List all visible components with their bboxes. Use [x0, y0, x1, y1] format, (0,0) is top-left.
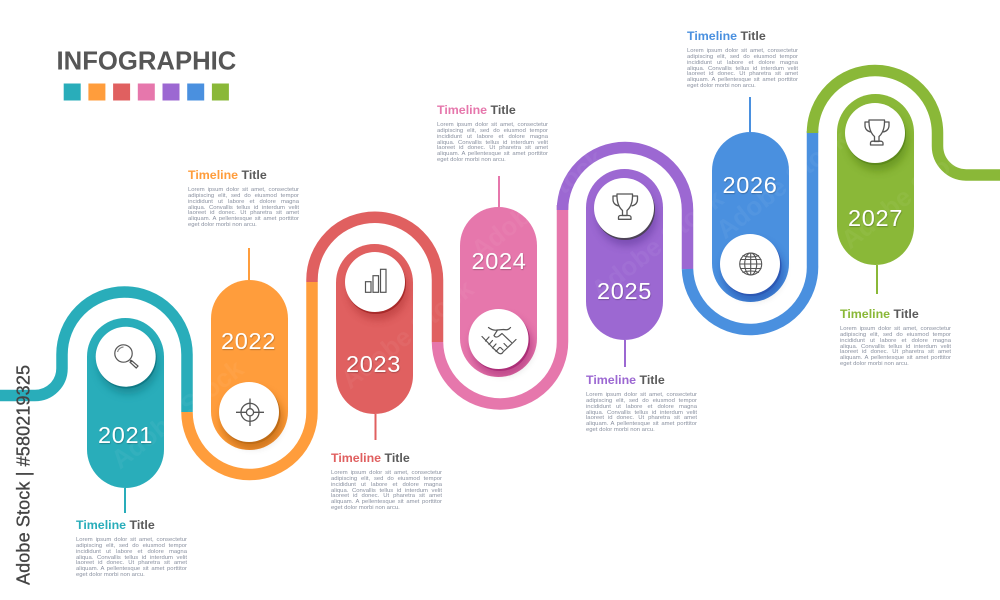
text block 2025: Lorem ipsum dolor sit amet, consectetur [586, 392, 697, 398]
icon: globe [740, 253, 762, 275]
text block 2021: eget dolor morbi non arcu. [76, 572, 145, 578]
text block 2024: Timeline Title [437, 103, 516, 117]
text block 2021: laoreet id donec. Ut pharetra sit amet [76, 560, 187, 566]
text block 2026: aliqua. Convallis tellus id interdum velit [687, 66, 798, 72]
year 2025: 2025 [597, 278, 652, 304]
text block 2024: aliqua. Convallis tellus id interdum velit [437, 140, 548, 146]
vertical stock id: Adobe Stock | #580219325 [14, 365, 34, 585]
text block 2027: Timeline Title [840, 307, 919, 321]
text block 2022: aliqua. Convallis tellus id interdum velit [188, 205, 299, 211]
text block 2027: eget dolor morbi non arcu. [840, 361, 909, 367]
text block 2023: incididunt ut labore et dolore magna [331, 482, 442, 488]
text block 2027 [840, 307, 951, 367]
legend squares [64, 84, 229, 100]
stock watermarks: Adobe Stock [710, 123, 854, 245]
text block 2027: adipiscing elit, sed do eiusmod tempor [840, 332, 951, 338]
text block 2024: incididunt ut labore et dolore magna [437, 134, 548, 140]
stock watermarks: Adobe Stock [835, 133, 979, 255]
text block 2024: aliquam. A pellentesque sit amet porttitor [437, 151, 548, 157]
text block 2026 [687, 29, 798, 89]
text block 2026: Lorem ipsum dolor sit amet, consectetur [687, 48, 798, 54]
year 2027: 2027 [848, 205, 903, 231]
text block 2021: adipiscing elit, sed do eiusmod tempor [76, 543, 187, 549]
text block 2023: adipiscing elit, sed do eiusmod tempor [331, 476, 442, 482]
stock watermarks [105, 123, 979, 475]
text block 2023: laoreet id donec. Ut pharetra sit amet [331, 493, 442, 499]
icon: handshake [482, 328, 516, 354]
text block 2021: Timeline Title [76, 518, 155, 532]
text block 2026: Timeline Title [687, 29, 766, 43]
text block 2023: eget dolor morbi non arcu. [331, 505, 400, 511]
text block 2023: aliqua. Convallis tellus id interdum velit [331, 488, 442, 494]
text block 2022: Lorem ipsum dolor sit amet, consectetur [188, 187, 299, 193]
milestone 2022 [211, 248, 288, 451]
text block 2025: eget dolor morbi non arcu. [586, 427, 655, 433]
text block 2025: Timeline Title [586, 373, 665, 387]
text block 2024 [437, 103, 548, 163]
text block 2024: Lorem ipsum dolor sit amet, consectetur [437, 122, 548, 128]
text block 2027: aliquam. A pellentesque sit amet porttitor [840, 355, 951, 361]
text block 2022: Timeline Title [188, 168, 267, 182]
text block 2027: Lorem ipsum dolor sit amet, consectetur [840, 326, 951, 332]
text block 2027: aliqua. Convallis tellus id interdum velit [840, 344, 951, 350]
text block 2024: eget dolor morbi non arcu. [437, 157, 506, 163]
text block 2027: incididunt ut labore et dolore magna [840, 338, 951, 344]
text block 2021: aliquam. A pellentesque sit amet porttitor [76, 566, 187, 572]
icon: trophy [613, 194, 638, 219]
text block 2021: Lorem ipsum dolor sit amet, consectetur [76, 537, 187, 543]
text block 2024: laoreet id donec. Ut pharetra sit amet [437, 145, 548, 151]
year 2026: 2026 [722, 172, 778, 198]
text block 2022: incididunt ut labore et dolore magna [188, 199, 299, 205]
text block 2025: aliqua. Convallis tellus id interdum velit [586, 410, 697, 416]
year 2022: 2022 [221, 328, 276, 354]
milestone 2024 [460, 176, 537, 378]
year 2024: 2024 [471, 248, 527, 274]
icon: target [236, 398, 264, 426]
text block 2023: aliquam. A pellentesque sit amet porttitor [331, 499, 442, 505]
winding timeline road [0, 70, 1000, 475]
text block 2025: adipiscing elit, sed do eiusmod tempor [586, 398, 697, 404]
icon: magnifier [115, 345, 138, 368]
stock watermarks: Adobe Stock [335, 273, 479, 395]
text block 2026: incididunt ut labore et dolore magna [687, 60, 798, 66]
text block 2027: laoreet id donec. Ut pharetra sit amet [840, 349, 951, 355]
title: INFOGRAPHIC [56, 48, 236, 76]
text block 2024: adipiscing elit, sed do eiusmod tempor [437, 128, 548, 134]
text block 2023: Lorem ipsum dolor sit amet, consectetur [331, 470, 442, 476]
text block 2025 [586, 373, 697, 433]
text block 2021 [76, 518, 187, 578]
icon: trophy [865, 120, 889, 145]
milestone 2026 [712, 97, 789, 303]
icon: bar chart [366, 269, 386, 292]
text block 2022: laoreet id donec. Ut pharetra sit amet [188, 210, 299, 216]
text block 2021: aliqua. Convallis tellus id interdum velit [76, 555, 187, 561]
year 2021: 2021 [98, 422, 153, 448]
text block 2022: adipiscing elit, sed do eiusmod tempor [188, 193, 299, 199]
milestone 2025 [586, 169, 663, 367]
text block 2026: laoreet id donec. Ut pharetra sit amet [687, 71, 798, 77]
milestone 2021 [87, 318, 164, 513]
text block 2026: adipiscing elit, sed do eiusmod tempor [687, 54, 798, 60]
text block 2022 [188, 168, 299, 228]
milestone 2027 [837, 94, 914, 294]
stock watermarks: Adobe Stock [105, 353, 249, 475]
text block 2025: aliquam. A pellentesque sit amet porttitor [586, 421, 697, 427]
stock watermarks: Adobe Stock [465, 143, 609, 265]
text block 2022: aliquam. A pellentesque sit amet porttitor [188, 216, 299, 222]
milestone 2023 [336, 244, 413, 440]
text block 2026: eget dolor morbi non arcu. [687, 83, 756, 89]
year 2023: 2023 [346, 351, 401, 377]
text block 2022: eget dolor morbi non arcu. [188, 222, 257, 228]
text block 2025: incididunt ut labore et dolore magna [586, 404, 697, 410]
text block 2021: incididunt ut labore et dolore magna [76, 549, 187, 555]
stock watermarks: Adobe Stock [585, 183, 729, 305]
text block 2026: aliquam. A pellentesque sit amet porttitor [687, 77, 798, 83]
text block 2023 [331, 451, 442, 511]
text block 2025: laoreet id donec. Ut pharetra sit amet [586, 415, 697, 421]
text block 2023: Timeline Title [331, 451, 410, 465]
